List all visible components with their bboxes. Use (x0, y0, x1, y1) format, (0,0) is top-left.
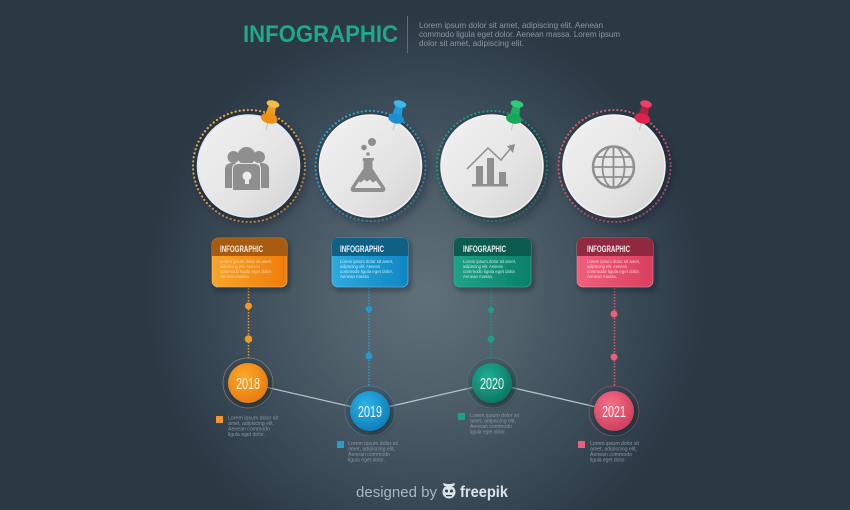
note: 2019: ligula eget dolor. (348, 458, 385, 464)
panel: green card: commodo ligula eget dolor. (463, 269, 516, 275)
panel: blue card: INFOGRAPHIC (340, 244, 384, 254)
note: 2018 (216, 416, 278, 438)
connector dots (245, 302, 617, 360)
panel: orange card: Lorem ipsum dolor sit amet, (220, 259, 272, 265)
note: 2020: Lorem ipsum dolor sit (470, 413, 519, 419)
panel: green card (454, 238, 531, 287)
note: 2019: Aenean commodo (348, 452, 390, 458)
panel: red card: INFOGRAPHIC (587, 244, 630, 254)
panel: orange column circle (193, 98, 305, 222)
note: 2020 (458, 413, 519, 436)
panel: orange card: INFOGRAPHIC (220, 244, 263, 254)
panel: red card: Lorem ipsum dolor sit amet, (587, 259, 640, 265)
note: 2018: amet, adipiscing elit, (228, 421, 274, 427)
note: 2019: amet, adipiscing elit, (348, 446, 395, 452)
connector lines (248, 288, 614, 386)
panel: blue card: adipiscing elit. Aenean (340, 264, 380, 270)
panel: blue card: Aenean massa. (340, 274, 370, 280)
note: 2021 (578, 441, 639, 464)
panel: blue column circle (316, 99, 426, 221)
panel: orange card (212, 238, 287, 287)
note: 2020: amet, adipiscing elit, (470, 418, 516, 424)
pin: blue (385, 99, 409, 132)
panel: orange card: adipiscing elit. Aenean (220, 264, 260, 270)
intro text (419, 20, 620, 48)
title divider (407, 16, 408, 53)
note: 2021: ligula eget dolor. (590, 458, 626, 464)
timeline node: 2019 (345, 386, 395, 436)
panel: red card (577, 238, 653, 287)
note: 2018: ligula eget dolor. (228, 432, 265, 438)
panel: green column circle (437, 99, 547, 221)
panel: blue card: Lorem ipsum dolor sit amet, (340, 259, 393, 265)
note: 2018: Lorem ipsum dolor sit (228, 416, 278, 422)
note: 2021: Lorem ipsum dolor sit (590, 441, 639, 447)
panel: blue card: commodo ligula eget dolor. (340, 269, 393, 275)
note: 2018: Aenean commodo (228, 426, 270, 432)
pin: red (632, 99, 655, 132)
timeline node: 2021 (589, 386, 639, 436)
timeline node: 2018 (223, 358, 273, 408)
panel: green card: INFOGRAPHIC (463, 244, 506, 254)
icon: globe (593, 146, 634, 188)
timeline node: 2020 (467, 358, 517, 408)
footer: designed by freepik (356, 483, 508, 501)
intro text: Lorem ipsum dolor sit amet, adipiscing elit. Aenean (419, 20, 603, 30)
note: 2019: Lorem ipsum dolor sit (348, 441, 398, 447)
intro text: dolor sit amet, adipiscing elit. (419, 38, 524, 48)
timeline node: 2018: 2018 (236, 376, 260, 393)
panel: orange card: commodo ligula eget dolor. (220, 269, 272, 275)
title: INFOGRAPHIC (243, 21, 398, 48)
intro text: commodo ligula eget dolor. Aenean massa. Lorem ipsum (419, 29, 620, 39)
timeline line (248, 383, 614, 411)
panel: red card: Aenean massa. (587, 274, 617, 280)
panel: orange card: Aenean massa. (220, 274, 250, 280)
footer: designed by freepik: freepik (460, 484, 508, 501)
icon: team with light bulb (225, 147, 269, 190)
panel: green card: adipiscing elit. Aenean (463, 264, 503, 270)
panel: blue card (332, 238, 408, 287)
note: 2021: Aenean commodo (590, 452, 632, 458)
icon: rising chart (467, 144, 515, 186)
note: 2020: Aenean commodo (470, 424, 512, 430)
note: 2020: ligula eget dolor. (470, 430, 506, 436)
footer: designed by freepik: designed by (356, 485, 438, 501)
icon: flask (351, 138, 385, 192)
panel: red card: adipiscing elit. Aenean (587, 264, 627, 270)
pin: green (504, 99, 526, 132)
panel: red card: commodo ligula eget dolor. (587, 269, 640, 275)
panel: green card: Lorem ipsum dolor sit amet, (463, 259, 516, 265)
pin: orange (258, 98, 282, 132)
note: 2021: amet, adipiscing elit, (590, 446, 637, 452)
note: 2019 (337, 441, 398, 464)
panel: red column circle (558, 99, 670, 222)
icon: freepik logo (442, 483, 456, 498)
panel: green card: Aenean massa. (463, 274, 493, 280)
timeline node: 2020: 2020 (480, 376, 504, 393)
timeline node: 2019: 2019 (358, 404, 382, 421)
timeline node: 2021: 2021 (602, 404, 626, 421)
